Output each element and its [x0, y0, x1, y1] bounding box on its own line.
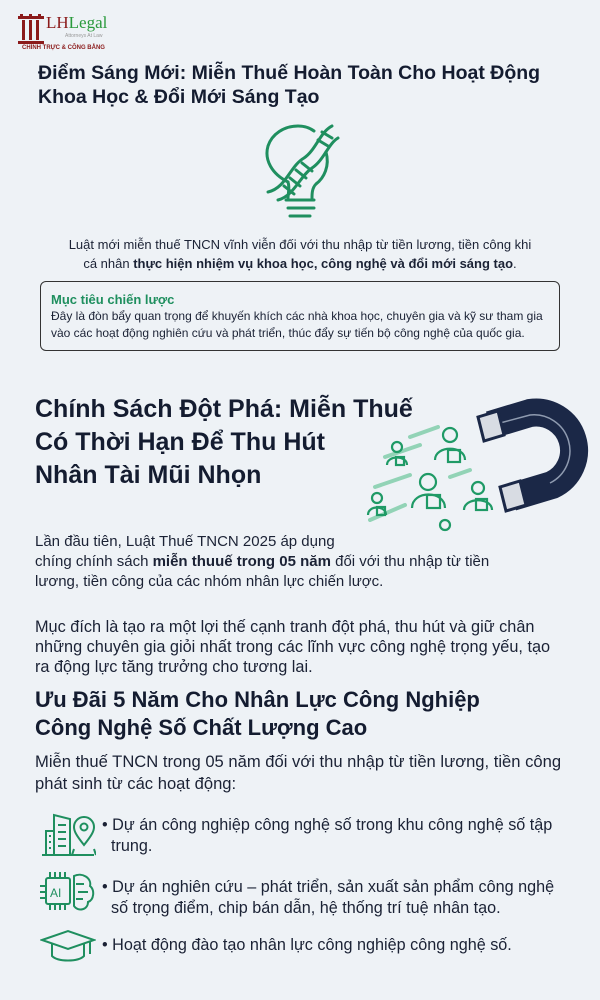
list text 3: • Hoạt động đào tạo nhân lực công nghiệp công nghệ số. — [102, 936, 512, 954]
title 1: Điểm Sáng Mới: Miễn Thuế Hoàn Toàn Cho Hoạt Động — [38, 62, 540, 84]
heading 3: Ưu Đãi 5 Năm Cho Nhân Lực Công Nghiệp — [35, 687, 480, 712]
icon: AI chip brain: AI — [50, 886, 61, 900]
paragraph: exemption: phát sinh từ các hoạt động: — [35, 774, 236, 793]
heading 2: Chính Sách Đột Phá: Miễn Thuế — [35, 395, 413, 423]
intro paragraph: cá nhân thực hiện nhiệm vụ khoa học, công nghệ và đổi mới sáng tạo. — [83, 256, 517, 271]
paragraph: purpose — [35, 618, 550, 676]
logo: Attorneys At Law — [65, 33, 103, 39]
icon: city buildings — [42, 814, 96, 856]
list item 3 — [40, 930, 512, 962]
intro paragraph — [69, 237, 531, 271]
paragraph: first time: lương, tiền công của các nhóm nhân lực chiến lược. — [35, 573, 383, 590]
heading 3: Công Nghệ Số Chất Lượng Cao — [35, 715, 367, 740]
paragraph: purpose: ra động lực tăng trưởng cho tương lai. — [35, 658, 313, 676]
list text 2 — [102, 878, 554, 917]
heading 2: Có Thời Hạn Để Thu Hút — [35, 428, 325, 456]
logo — [18, 13, 107, 51]
callout text — [51, 309, 543, 340]
list text 1: • Dự án công nghiệp công nghệ số trong khu công nghệ số tập — [102, 816, 552, 834]
list text 1 — [102, 816, 552, 855]
paragraph: exemption — [35, 752, 561, 793]
heading 2: Nhân Tài Mũi Nhọn — [35, 461, 261, 489]
heading 3 — [35, 687, 480, 740]
paragraph: purpose: những chuyên gia giỏi nhất trong các lĩnh vực công nghệ trọng yếu, tạo — [35, 638, 550, 656]
paragraph: purpose: Mục đích là tạo ra một lợi thế cạnh tranh đột phá, thu hút và giữ chân — [35, 618, 534, 636]
logo: LHLegal — [46, 13, 107, 32]
logo: CHÍNH TRỰC & CÔNG BẰNG — [22, 45, 105, 51]
icon: AI chip brain — [40, 872, 94, 910]
callout: strategic goal — [40, 281, 560, 351]
title 1 — [38, 62, 540, 108]
list item 1 — [42, 814, 552, 856]
paragraph: first time — [35, 533, 489, 590]
intro paragraph: Luật mới miễn thuế TNCN vĩnh viễn đối với thu nhập từ tiền lương, tiền công khi — [69, 237, 531, 252]
paragraph: exemption: Miễn thuế TNCN trong 05 năm đối với thu nhập từ tiền lương, tiền công — [35, 752, 561, 771]
icon: lightbulb with DNA — [265, 124, 340, 218]
callout heading: Mục tiêu chiến lược — [51, 292, 174, 307]
callout text: Đây là đòn bẩy quan trọng để khuyến khích các nhà khoa học, chuyên gia và kỹ sư tham gia — [51, 309, 543, 323]
list text 1: trung. — [111, 837, 152, 855]
paragraph: first time: chíng chính sách miễn thuuế trong 05 năm đối với thu nhập từ tiền — [35, 553, 489, 570]
list item 2 — [40, 872, 554, 917]
list text 2: số trọng điểm, chip bán dẫn, hệ thống trí tuệ nhân tạo. — [111, 899, 501, 917]
heading 2 — [35, 394, 413, 489]
callout text: vào các hoạt động nghiên cứu và phát triển, thúc đẩy sự tiến bộ công nghệ của quốc gia. — [51, 326, 525, 340]
illustration: magnet attracting talent — [366, 398, 588, 532]
list text 2: • Dự án nghiên cứu – phát triển, sản xuất sản phẩm công nghệ — [102, 878, 554, 896]
icon: graduation cap — [40, 930, 96, 962]
title 1: Khoa Học & Đổi Mới Sáng Tạo — [38, 86, 319, 108]
paragraph: first time: Lần đầu tiên, Luật Thuế TNCN 2025 áp dụng — [35, 533, 335, 550]
